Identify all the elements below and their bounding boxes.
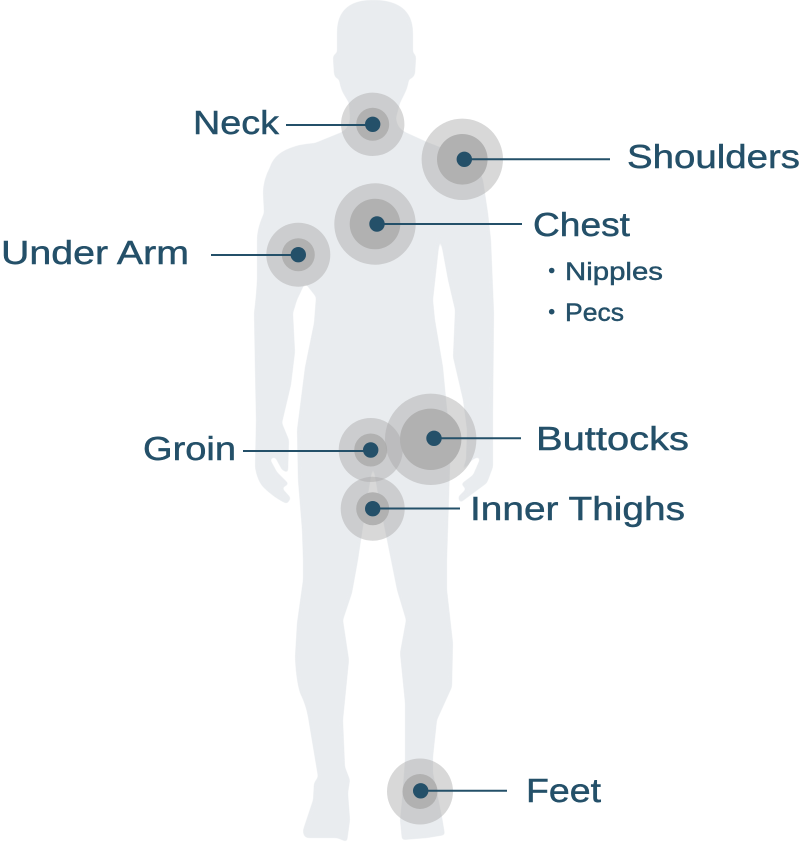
marker: feet [387, 758, 507, 824]
marker: inner thighs [341, 477, 460, 541]
label: Inner Thighs: Inner Thighs [470, 490, 685, 527]
marker: buttocks [385, 394, 521, 485]
label: Groin: Groin [143, 430, 236, 467]
label: Pecs: Pecs [565, 299, 624, 327]
label: Feet: Feet [526, 772, 601, 809]
bullet: Pecs [549, 309, 554, 315]
label: Chest: Chest [533, 206, 630, 243]
body silhouette [254, 0, 494, 842]
bullet: Nipples [549, 268, 554, 273]
label: Shoulders: Shoulders [627, 138, 800, 175]
marker: under arm [211, 223, 330, 287]
marker: shoulders [422, 119, 610, 200]
marker: chest [334, 183, 522, 265]
label: Nipples: Nipples [565, 258, 663, 286]
label: Under Arm: Under Arm [1, 234, 189, 271]
marker: neck [286, 93, 404, 156]
label: Buttocks: Buttocks [536, 420, 689, 457]
label: Neck: Neck [193, 104, 280, 141]
marker: groin [243, 418, 403, 482]
